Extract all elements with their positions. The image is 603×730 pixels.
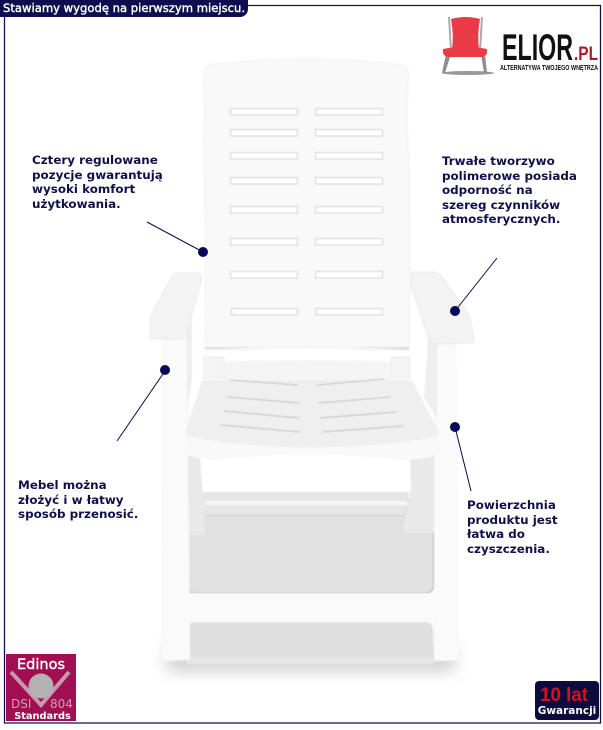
- white gap under the seat: [200, 450, 415, 493]
- icon: red chair: [442, 17, 494, 75]
- white gap between back and seat: [224, 349, 390, 361]
- left armrest: [150, 273, 202, 339]
- callout line and dot: post: [117, 365, 170, 441]
- rear seat panel: [224, 360, 390, 380]
- callout line and dot: surface: [450, 422, 471, 491]
- text: durable material: atmosferycznych.: [442, 212, 560, 226]
- text: easy to clean: Powierzchnia: [467, 498, 556, 512]
- text: adjustable positions: [32, 153, 163, 210]
- inner leg right: [403, 455, 434, 533]
- text: easy to clean: [466, 498, 558, 556]
- seat: [186, 379, 440, 460]
- callout line and dot: armrest: [450, 258, 497, 316]
- front cross rail: [186, 593, 434, 622]
- left post: [162, 339, 190, 661]
- right armrest: [411, 272, 474, 344]
- text: durable material: odporność na: [442, 183, 533, 197]
- right arm strut: [424, 325, 437, 418]
- cross bar: [202, 492, 410, 516]
- callout line and dot: backrest: [147, 222, 208, 257]
- badge: 10 lat warranty: Gwarancji: [538, 705, 596, 717]
- text: foldable: sposób przenosić.: [18, 507, 138, 521]
- logo: Elior: .PL: [574, 44, 598, 65]
- text: foldable: Mebel można: [18, 478, 107, 492]
- badge: Edinos DSI 804 Standards: Edinos: [17, 657, 65, 673]
- text: easy to clean: czyszczenia.: [467, 542, 550, 556]
- backrest slots: [230, 108, 382, 315]
- ground shadow: [166, 645, 455, 672]
- header bar: Stawiamy wygodę na pierwszym miejscu.: [3, 1, 245, 15]
- badge: Edinos DSI 804 Standards: DSI: [11, 697, 31, 711]
- text: easy to clean: łatwa do: [467, 527, 525, 541]
- right post: [434, 344, 458, 661]
- badge: 10 lat warranty: [535, 681, 599, 720]
- text: durable material: polimerowe posiada: [442, 168, 577, 182]
- hinges: [204, 357, 410, 378]
- text: adjustable positions: użytkowania.: [32, 196, 121, 210]
- inner leg left: [186, 455, 205, 535]
- text: adjustable positions: wysoki komfort: [32, 182, 135, 196]
- text: durable material: szereg czynników: [442, 198, 560, 212]
- text: foldable: złożyć i w łatwy: [18, 492, 124, 506]
- logo: Elior: [442, 17, 598, 75]
- text: adjustable positions: Cztery regulowane: [32, 153, 158, 167]
- text: adjustable positions: pozycje gwarantują: [32, 168, 163, 182]
- badge: Edinos DSI 804 Standards: 804: [50, 697, 73, 711]
- text: durable material: Trwałe tworzywo: [442, 154, 555, 168]
- backrest: [203, 59, 410, 350]
- badge: 10 lat warranty: 10 lat: [540, 685, 589, 706]
- text: foldable: [18, 478, 138, 521]
- floor seen through the frame: [186, 500, 434, 664]
- left arm strut: [187, 300, 192, 412]
- badge: Edinos DSI 804 Standards: [6, 654, 76, 722]
- text: durable material: [442, 154, 577, 226]
- text: easy to clean: produktu jest: [467, 512, 558, 526]
- badge: Edinos DSI 804 Standards: Standards: [14, 711, 71, 722]
